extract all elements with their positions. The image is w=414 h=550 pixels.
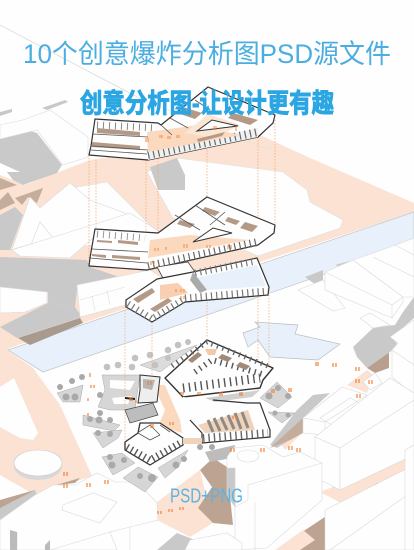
ground floor plan [125, 340, 273, 465]
landscape garden patches with trees [57, 339, 295, 492]
subtitle: 创意分析图-让设计更有趣 [80, 88, 334, 119]
upper left buildings [0, 100, 163, 317]
orange dashed projection lines [89, 120, 275, 440]
title: 10个创意爆炸分析图PSD源文件 [23, 39, 391, 69]
bottom centre hexagonal building [0, 473, 158, 550]
pond [243, 322, 340, 360]
brown road pieces [0, 178, 303, 448]
white upper street blocks [0, 25, 343, 256]
right side buildings [298, 238, 414, 550]
lower loop floor plan [126, 258, 269, 322]
shadows of buildings [0, 130, 414, 550]
format label: PSD+PNG [170, 486, 243, 508]
orange people markers [64, 362, 372, 514]
bottom left circular plaza [14, 450, 62, 480]
bottom centre tower [185, 445, 322, 550]
top floor plan [89, 87, 275, 160]
middle floor plan [89, 197, 275, 270]
site base: roads and river [0, 135, 414, 550]
